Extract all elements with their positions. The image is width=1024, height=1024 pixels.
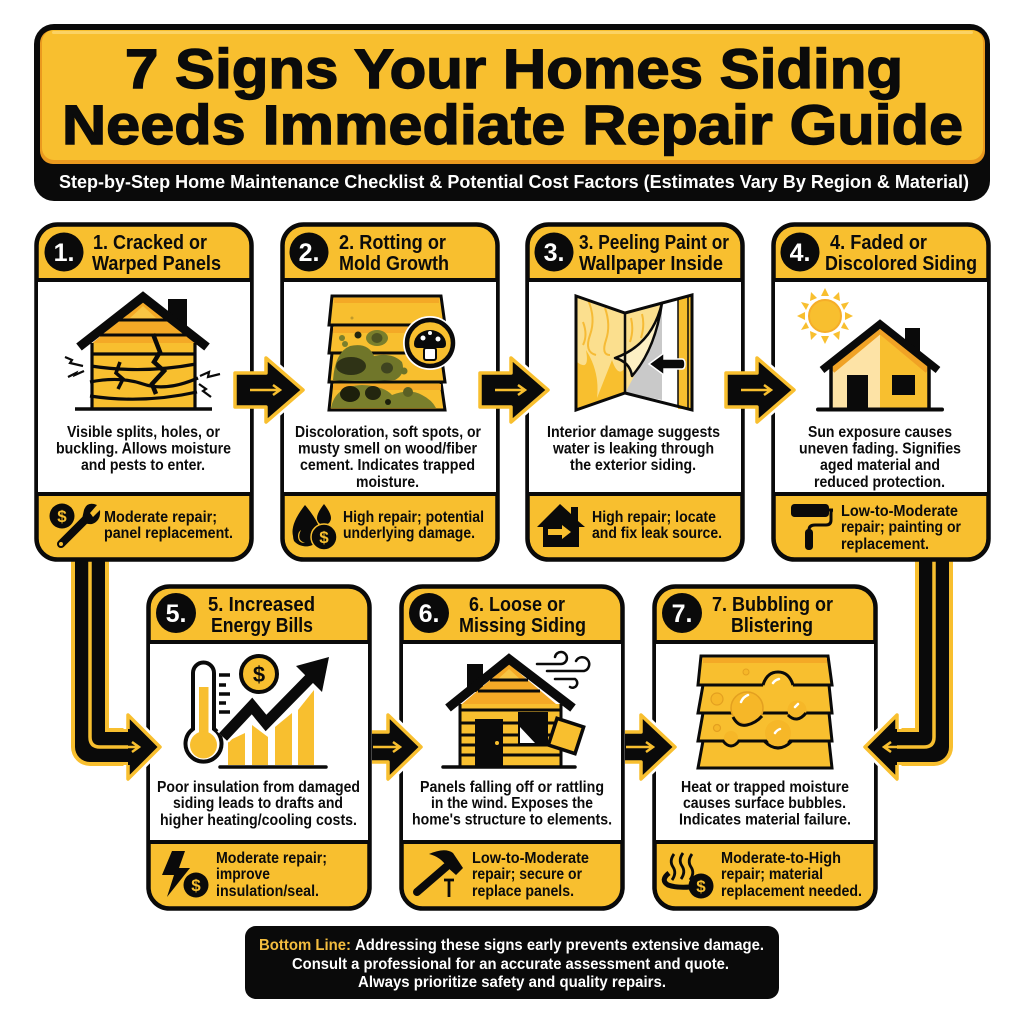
- icon: cracked house: [65, 297, 220, 409]
- heading: sign 5: Energy Bills: [211, 614, 313, 637]
- icon: faded house: [818, 324, 942, 410]
- text: sign 7 description: [679, 779, 851, 828]
- heading: sign 3: [579, 231, 729, 275]
- text: sign 2 description: [295, 424, 481, 491]
- arrow: sign 3 to sign 4: [726, 358, 794, 422]
- text: sign 3 cost: [592, 509, 722, 542]
- text: sign 2 description: musty smell on wood/fiber: [298, 440, 477, 458]
- text: sign 2 description: moisture.: [356, 474, 419, 491]
- heading: sign 7: 7. Bubbling or: [712, 593, 833, 616]
- text: sign 6 description: in the wind. Exposes the: [431, 795, 593, 812]
- text: sign 7 description: Indicates material failure.: [679, 812, 851, 828]
- arrow: sign 6 to sign 7: [625, 715, 675, 779]
- text: sign 3 description: Interior damage suggests: [547, 424, 720, 441]
- heading: sign 1: [92, 231, 221, 275]
- text: sign 7 description: causes surface bubbles.: [683, 795, 846, 812]
- panel: sign 1: 1.: [54, 239, 74, 267]
- title: Needs Immediate Repair Guide: [62, 93, 963, 156]
- icon: peeling wall corner: [576, 295, 692, 410]
- heading: sign 4: Discolored Siding: [825, 252, 977, 275]
- text: sign 1 description: and pests to enter.: [81, 457, 205, 474]
- heading: sign 5: 5. Increased: [208, 593, 315, 616]
- arrow: sign 2 to sign 3: [480, 358, 548, 422]
- panel: sign 7: [654, 586, 876, 908]
- text: sign 5 cost: insulation/seal.: [216, 883, 319, 900]
- panel: sign 3: [528, 224, 742, 560]
- icon: hammer and nail: [417, 850, 463, 897]
- text: sign 4 cost: Low-to-Moderate: [841, 503, 958, 520]
- text: sign 4 description: aged material and: [820, 457, 940, 474]
- text: sign 3 description: the exterior siding.: [570, 457, 696, 474]
- heading: sign 2: Mold Growth: [339, 252, 449, 275]
- text: sign 1 description: Visible splits, holes, or: [67, 424, 220, 441]
- icon: lightning bolt and coin: [162, 851, 208, 898]
- icon: blistered siding: [698, 656, 832, 768]
- text: sign 5 description: siding leads to drafts and: [173, 795, 343, 812]
- heading: sign 1: Warped Panels: [92, 252, 221, 275]
- panel: sign 2: 2.: [299, 239, 319, 267]
- text: sign 3 description: [547, 424, 720, 474]
- icon: thermometer: [186, 662, 230, 762]
- text: sign 6 description: Panels falling off or rattling: [420, 779, 604, 796]
- text: sign 6 cost: replace panels.: [472, 883, 574, 900]
- text: sign 7 cost: Moderate-to-High: [721, 850, 841, 867]
- text: sign 1 cost: Moderate repair;: [104, 509, 217, 526]
- text: sign 2 cost: High repair; potential: [343, 509, 484, 526]
- text: sign 2 cost: underlying damage.: [343, 525, 475, 542]
- heading: sign 2: 2. Rotting or: [339, 231, 446, 254]
- heading: sign 6: [459, 593, 586, 637]
- callout: bottom line: Consult a professional for an accurate assessment and quote.: [292, 956, 729, 973]
- text: sign 1 cost: [104, 509, 233, 542]
- icon: moldy siding: [329, 296, 457, 410]
- icon: heat steam and coin: [664, 853, 714, 898]
- heading: sign 3: Wallpaper Inside: [579, 252, 723, 275]
- icon: wind: [537, 652, 589, 688]
- text: sign 5 cost: improve: [216, 866, 270, 883]
- callout: bottom line: Bottom Line:: [259, 937, 351, 954]
- text: sign 7 description: Heat or trapped moisture: [681, 779, 849, 796]
- icon: paint roller: [791, 504, 833, 550]
- text: sign 1 cost: panel replacement.: [104, 525, 233, 542]
- text: sign 6 cost: [472, 850, 589, 900]
- panel: sign 1: [36, 224, 252, 560]
- title: 7 Signs Your Homes Siding: [125, 37, 903, 100]
- panel: sign 4: [774, 224, 988, 560]
- panel: sign 2: [282, 224, 498, 560]
- text: sign 5 cost: Moderate repair;: [216, 850, 327, 867]
- title banner: [34, 24, 990, 201]
- heading: sign 1: 1. Cracked or: [93, 231, 207, 254]
- arrow: sign 1 to sign 2: [235, 358, 303, 422]
- text: sign 4 description: [799, 424, 961, 491]
- panel: sign 4: 4.: [790, 239, 810, 267]
- heading: sign 4: [825, 231, 977, 275]
- text: sign 4 description: Sun exposure causes: [808, 424, 952, 441]
- text: sign 4 cost: replacement.: [841, 536, 929, 553]
- text: sign 4 description: uneven fading. Signifies: [799, 440, 961, 458]
- text: sign 5 description: Poor insulation from damaged: [157, 779, 360, 796]
- icon: lightning bolt and coin: $: [191, 876, 201, 895]
- icon: coin and wrench: $: [57, 507, 67, 526]
- heading: sign 2: [339, 231, 449, 275]
- text: sign 2 cost: [343, 509, 484, 542]
- text: sign 7 cost: replacement needed.: [721, 883, 862, 900]
- text: sign 6 description: home's structure to elements.: [412, 812, 612, 828]
- text: sign 5 description: [157, 779, 360, 829]
- panel: sign 7: 7.: [672, 600, 692, 628]
- icon: heat steam and coin: $: [696, 877, 706, 896]
- text: sign 3 cost: and fix leak source.: [592, 525, 722, 542]
- panel: sign 6: 6.: [419, 600, 439, 628]
- text: sign 6 cost: repair; secure or: [472, 866, 582, 883]
- text: sign 3 description: water is leaking through: [552, 440, 714, 458]
- text: sign 6 cost: Low-to-Moderate: [472, 850, 589, 867]
- elbow arrow: card 1 to card 5: [90, 556, 135, 747]
- text: sign 6 description: [412, 779, 612, 828]
- text: sign 4 cost: [841, 503, 961, 553]
- text: sign 1 description: buckling. Allows moisture: [56, 440, 231, 458]
- arrow head: elbow into sign 5: [110, 715, 160, 779]
- title: [62, 37, 963, 156]
- callout: bottom line: Addressing these signs early prevents extensive damage.: [355, 937, 764, 954]
- heading: sign 7: Blistering: [731, 614, 813, 637]
- text: sign 4 description: reduced protection.: [814, 474, 945, 491]
- text: sign 2 description: Discoloration, soft spots, or: [295, 424, 481, 441]
- icon: mushroom badge: [403, 316, 457, 370]
- subtitle: Step-by-Step Home Maintenance Checklist & Potential Cost Factors (Estimates Vary By Region & Material): [59, 171, 969, 192]
- text: sign 7 cost: repair; material: [721, 866, 823, 883]
- arrow: sign 5 to sign 6: [372, 715, 421, 779]
- icon: sun: [797, 288, 853, 344]
- elbow arrow: card 4 to card 7: [890, 556, 934, 747]
- callout: bottom line: Always prioritize safety and quality repairs.: [358, 974, 666, 991]
- text: sign 2 description: cement. Indicates trapped: [300, 457, 475, 474]
- arrow head: elbow into sign 7: [865, 715, 915, 779]
- panel: sign 3: 3.: [544, 239, 564, 267]
- callout: bottom line: [245, 926, 779, 999]
- heading: sign 6: 6. Loose or: [469, 593, 565, 616]
- text: sign 5 description: higher heating/cooling costs.: [160, 812, 357, 829]
- icon: house with missing panel: [443, 652, 589, 767]
- icon: rising cost chart: [220, 656, 329, 767]
- panel: sign 5: 5.: [166, 600, 186, 628]
- icon: house with leak arrow: [537, 504, 585, 547]
- icon: water drops and coin: $: [319, 528, 329, 547]
- panel: sign 6: [402, 586, 623, 908]
- text: sign 3 cost: High repair; locate: [592, 509, 716, 526]
- icon: rising cost chart: $: [253, 662, 265, 687]
- text: sign 5 cost: [216, 850, 327, 900]
- text: sign 7 cost: [721, 850, 862, 900]
- heading: sign 5: [208, 593, 315, 637]
- text: sign 1 description: [56, 424, 231, 474]
- heading: sign 6: Missing Siding: [459, 614, 586, 637]
- heading: sign 3: 3. Peeling Paint or: [579, 231, 729, 254]
- text: sign 4 cost: repair; painting or: [841, 519, 961, 536]
- panel: sign 5: [148, 586, 370, 908]
- heading: sign 7: [712, 593, 833, 637]
- icon: water drops and coin: [292, 504, 337, 550]
- heading: sign 4: 4. Faded or: [830, 231, 927, 254]
- icon: coin and wrench: [50, 504, 100, 546]
